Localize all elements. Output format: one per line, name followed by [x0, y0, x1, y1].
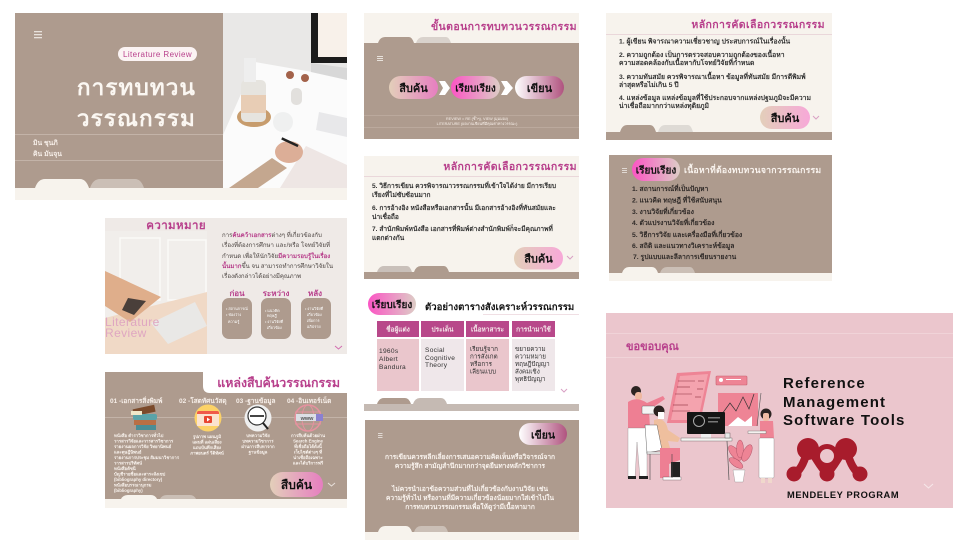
source descriptions: (bibliography)	[114, 488, 143, 493]
step: search	[389, 76, 438, 99]
photo: laptop and notebook on desk: Review	[105, 326, 147, 340]
icon: menu	[34, 31, 42, 38]
button: search	[270, 472, 323, 497]
panel: sources slide: ฐานข้อมูล	[249, 448, 268, 456]
source descriptions: วารสารวิจัยและวารสารวิชาการ	[114, 438, 174, 444]
table: Bandura	[379, 364, 406, 371]
table: หรือการ	[470, 360, 493, 368]
note	[437, 115, 518, 127]
panel: sources slide: รูปภาพ แผนภูมิ	[193, 433, 221, 440]
heading tab	[203, 372, 347, 393]
icon: menu	[378, 433, 382, 438]
title: วรรณกรรม	[77, 106, 196, 131]
panel: sources slide: ภาพยนตร์ วีดิทัศน์	[190, 450, 224, 456]
panel: writing slide	[365, 420, 579, 540]
tabs	[378, 37, 451, 43]
heading: reference management: Software Tools	[783, 412, 906, 429]
icon: video	[194, 404, 222, 432]
heading: reference management: Management	[783, 394, 886, 411]
body text: การเขียนควรหลีกเลี่ยงการเสนอความคิดเห็นหรือวิจารณ์จาก	[385, 451, 555, 461]
heading: หลักการคัดเลือกวรรณกรรม	[691, 18, 825, 31]
button: search: สืบค้น	[524, 252, 553, 266]
table: ความหมาย	[515, 354, 546, 360]
step: write	[515, 76, 564, 99]
column: during: • งานวิจัยที่	[265, 319, 284, 324]
source descriptions: และดุษฎีนิพนธ์	[114, 448, 142, 456]
tabs	[377, 398, 447, 404]
heading tab: แหล่งสืบค้นวรรณกรรม	[217, 376, 340, 390]
criteria text: น่าเชื่อถือมากกว่าแหล่งทุติยภูมิ	[619, 100, 709, 111]
illustration: team at computer	[628, 371, 774, 483]
step: organize: เรียบเรียง	[455, 82, 496, 94]
criteria text: 4. แหล่งข้อมูล แหล่งข้อมูลที่ใช้ประกอบจากแหล่งปฐมภูมิจะมีความ	[619, 92, 811, 103]
panel: sources slide: ผ่านการสืบหาจาก	[241, 444, 275, 449]
heading: reference management	[783, 375, 906, 429]
source labels: 01 -เอกสารสิ่งพิมพ์	[110, 395, 162, 405]
list: 7. รูปแบบและลีลาการเขียนรายงาน	[633, 253, 737, 262]
body text: ไม่ควรนำเอาข้อความส่วนที่ไม่เกี่ยวข้องกับงานวิจัย เช่น	[391, 483, 548, 493]
panel: sources slide: บทความวิจัย	[246, 433, 270, 438]
column: before	[222, 289, 252, 339]
person standing left	[631, 386, 641, 396]
panel: thank you slide	[606, 313, 953, 508]
authors	[33, 139, 62, 158]
list: 3. งานวิจัยที่เกี่ยวข้อง	[632, 206, 694, 216]
definition text: เรื่องดังกล่าวได้อย่างมีคุณภาพ	[222, 272, 301, 280]
column: during: เกี่ยวข้อง	[267, 325, 282, 330]
icon: chevron	[567, 256, 573, 259]
column: during: ทฤษฎี	[267, 313, 277, 318]
table: ทฤษฎีปัญญา	[515, 360, 550, 368]
badge: organize: เรียบเรียง	[636, 164, 676, 176]
icon: chevron	[924, 484, 933, 488]
icon: books	[131, 405, 157, 430]
source descriptions: รายงานการประชุม สัมมนาวิชาการ	[114, 454, 180, 461]
badge: write: เขียน	[531, 428, 556, 442]
table: สังคมเชิง	[515, 368, 540, 376]
list	[632, 183, 742, 262]
panel: sources slide: น่าเชื่อถือเฉพาะ	[293, 454, 323, 460]
step: write: เขียน	[527, 82, 553, 95]
column: after	[301, 289, 331, 339]
photo: desk with monitor and hand writing	[223, 13, 347, 188]
logo: Mendeley	[786, 438, 868, 482]
person sitting	[654, 406, 664, 416]
criteria text	[372, 180, 556, 242]
note: REVIEW = RE (ซ้ำๆ), VIEW (มุมมอง)	[446, 115, 509, 122]
panel: sources slide: เว็บไซต์ต่างๆ ที่	[294, 448, 322, 454]
icon: globe www: www	[300, 416, 314, 422]
table: ชื่อผู้แต่ง	[386, 324, 410, 334]
tabs	[121, 495, 196, 499]
icon: chevron	[328, 483, 335, 486]
source descriptions: หนังสือดัชนี	[114, 466, 136, 471]
criteria text: เรียงที่ไม่ซับซ้อนมาก	[372, 189, 431, 199]
tabs	[377, 266, 449, 272]
table: ขยายความ	[515, 346, 546, 353]
criteria text: 7. สำนักพิมพ์หนังสือ เอกสารที่พิมพ์ต่างสำนักพิมพ์ก็จะมีคุณภาพที่	[372, 223, 553, 233]
list: 1. สถานการณ์ที่เป็นปัญหา	[632, 183, 709, 193]
table: การสังเกต	[470, 354, 498, 360]
table: เลียนแบบ	[470, 368, 496, 376]
criteria text: ความสอดคล้องกับเนื้อหากับโจทย์วิจัยที่กำหนด	[619, 57, 755, 67]
panel: cover slide	[15, 13, 347, 200]
panel: sources slide: และได้บริการฟรี	[293, 460, 324, 466]
heading: ตัวอย่างตารางสังเคราะห์วรรณกรรม	[425, 301, 574, 313]
table: พุทธิปัญญา	[515, 375, 545, 383]
source labels: 03 -ฐานข้อมูล	[236, 396, 276, 406]
tabs	[622, 267, 695, 273]
heading: ความหมาย	[146, 220, 206, 232]
table: Cognitive	[425, 355, 455, 362]
panel: sources slide: การสืบค้นด้วยผ่าน	[291, 432, 325, 438]
column: before: • ช่องว่าง	[226, 312, 241, 317]
source descriptions: หนังสือบรรณานุกรม	[114, 482, 152, 488]
criteria text: 1. ผู้เขียน พิจารณาความเชี่ยวชาญ ประสบการณ์ในเรื่องนั้น	[619, 36, 791, 46]
tabs	[620, 125, 693, 132]
definition text: การค้นคว้าเอกสารต่างๆ ที่เกี่ยวข้องกับ	[222, 231, 322, 239]
source labels: 04 -อินเทอร์เน็ต	[287, 396, 331, 405]
button: search	[760, 106, 810, 129]
criteria text: 3. ความทันสมัย ควรพิจารณาเนื้อหา ข้อมูลที่ทันสมัย มีการตีพิมพ์	[619, 71, 806, 82]
person standing right	[760, 408, 772, 420]
panel: sources slide: ที่เชื่อถือได้ดังนี้	[294, 442, 323, 449]
column: after: อภิปราย	[307, 324, 321, 329]
column: before: ความรู้	[228, 319, 239, 324]
column: after: • งานวิจัยที่	[305, 306, 324, 311]
panel: sources slide: บทความวิชาการ	[242, 438, 274, 444]
table: 1960s	[379, 348, 399, 355]
table: เรียนรู้จาก	[470, 345, 498, 353]
heading: reference management: Reference	[783, 375, 866, 392]
source descriptions: หนังสือ ตำราวิชาการทั่วไป	[114, 432, 164, 438]
criteria text: 5. วิธีการเขียน ควรพิจารณาวรรณกรรมที่เข้าใจได้ง่าย มีการเรียบ	[372, 180, 556, 190]
panel: content to review slide	[609, 155, 832, 281]
heading: ขั้นตอนการทบทวนวรรณกรรม	[431, 18, 577, 33]
body text: ความรู้ทั่วไป หรืองานที่มีความเกี่ยวข้องน้อยมากใส่เข้าไปใน	[386, 492, 555, 503]
button: search: สืบค้น	[770, 112, 800, 125]
list: 4. ตัวแปรงานวิจัยที่เกี่ยวข้อง	[632, 217, 714, 227]
panel: selection criteria part 1	[606, 13, 832, 140]
definition text: เรื่องที่ต้องการศึกษา และ/หรือ โจทย์วิจัยที่	[222, 241, 330, 249]
heading: หลักการคัดเลือกวรรณกรรม	[443, 160, 577, 173]
badge: Literature Review	[118, 47, 197, 61]
table: Social	[425, 347, 445, 354]
criteria text: ล่าสุดหรือไม่เกิน 5 ปี	[619, 80, 679, 89]
table: การนำมาใช้	[516, 324, 551, 334]
definition text: กำหนด เพื่อให้นักวิจัยมีความรอบรู้ในเรื่อง	[222, 251, 330, 261]
icon: magnifier	[244, 404, 272, 432]
button: search	[514, 247, 563, 270]
panel: sources slide: Search Engine	[293, 438, 324, 444]
badge: write	[519, 423, 567, 445]
column: after: หลัง	[308, 289, 322, 298]
authors: คิน มันจุน	[33, 150, 62, 158]
column: before: ก่อน	[229, 289, 245, 298]
criteria text	[619, 36, 811, 111]
body text: การทบทวนวรรณกรรมเพื่อให้ดูว่ามีเนื้อหามาก	[405, 501, 535, 512]
source descriptions: รายงานผลการวิจัย วิทยานิพนธ์	[114, 443, 172, 449]
icon: chevron	[335, 346, 342, 349]
badge: organize: เรียบเรียง	[372, 299, 412, 311]
body text: ความรู้สึก สามัญสำนึกมากกว่าจุดยืนทางหลักวิชาการ	[395, 461, 546, 471]
source descriptions: วารสารปริทัศน์	[114, 460, 142, 466]
step: organize	[451, 76, 500, 99]
icon: globe www	[295, 405, 323, 431]
heading: ขอขอบคุณ	[626, 341, 680, 354]
panel: sources slide	[105, 372, 347, 508]
criteria text: แตกต่างกัน	[372, 234, 405, 242]
source descriptions	[114, 432, 180, 493]
panel: selection criteria part 2	[364, 156, 579, 279]
source labels	[110, 395, 331, 406]
criteria text: 2. ความถูกต้อง เป็นการตรวจสอบความถูกต้องของเนื้อหา	[619, 49, 785, 60]
column: during: • แนวคิด	[265, 309, 280, 313]
panel: definition slide	[105, 218, 347, 354]
body text	[385, 451, 555, 512]
arrow	[439, 81, 450, 95]
tabs	[378, 526, 448, 532]
definition text	[222, 231, 334, 280]
table: ประเด็น	[432, 324, 454, 334]
badge: Literature Review: Literature Review	[123, 50, 192, 59]
column: after: เกี่ยวข้อง	[307, 312, 322, 317]
title: การทบทวน	[77, 75, 196, 100]
heading: เนื้อหาที่ต้องทบทวนจากวรรณกรรม	[684, 163, 821, 175]
table: Albert	[379, 356, 398, 363]
list: 5. วิธีการวิจัย และเครื่องมือที่เกี่ยวข้อง	[632, 229, 742, 239]
panel: process steps slide	[364, 13, 579, 139]
source descriptions: (bibliography directory)	[114, 477, 163, 482]
column: during: ระหว่าง	[263, 289, 289, 298]
authors: มิน ชุนภิ	[33, 139, 58, 147]
icon: menu	[377, 56, 383, 61]
icon: chevron	[813, 116, 819, 119]
photo: laptop and notebook on desk	[105, 231, 207, 354]
label: Mendeley program: MENDELEY PROGRAM	[787, 490, 899, 500]
source descriptions: บัญชีรายชื่อและสาระสังเขป	[114, 470, 166, 478]
panel: sources slide: แถบบันทึกเสียง	[193, 444, 221, 450]
note: LITERATURE (ผลงานเขียนที่มีคุณค่าทางวรรณะ)	[437, 121, 518, 127]
badge: organize	[368, 293, 416, 315]
panel: sources slide: แผนที่ แผ่นเสียง	[192, 438, 222, 444]
source labels: 02 -โสตทัศนวัสดุ	[179, 396, 227, 405]
definition text: นั้นมากขึ้น จน สามารถทำการศึกษาวิจัยใน	[222, 260, 334, 270]
plant	[726, 440, 754, 470]
panel: synthesis table slide	[364, 293, 579, 411]
tabs	[35, 179, 144, 188]
badge: organize	[632, 158, 680, 181]
table: เนื้อหาสาระ	[471, 324, 505, 334]
photo: laptop and notebook on desk: Literature	[105, 315, 160, 329]
table	[377, 321, 555, 391]
arrow	[501, 81, 513, 95]
column: before: • สถานการณ์	[226, 306, 248, 311]
table: Theory	[425, 362, 448, 369]
icon: menu	[622, 168, 627, 173]
criteria text: น่าเชื่อถือ	[372, 211, 399, 221]
step: search: สืบค้น	[399, 82, 428, 95]
button: search: สืบค้น	[281, 478, 313, 492]
column: during	[261, 289, 291, 339]
title	[77, 75, 196, 131]
column: after: เพื่อการ	[307, 318, 320, 323]
criteria text: 6. การอ้างอิง หนังสือหรือเอกสารนั้น มีเอกสารอ้างอิงที่ทันสมัยและ	[372, 202, 556, 212]
icon: chevron	[561, 389, 567, 392]
list: 6. สถิติ และแนวทางวิเคราะห์ข้อมูล	[632, 241, 734, 251]
list: 2. แนวคิด ทฤษฎี ที่ใช้สนับสนุน	[632, 194, 722, 204]
